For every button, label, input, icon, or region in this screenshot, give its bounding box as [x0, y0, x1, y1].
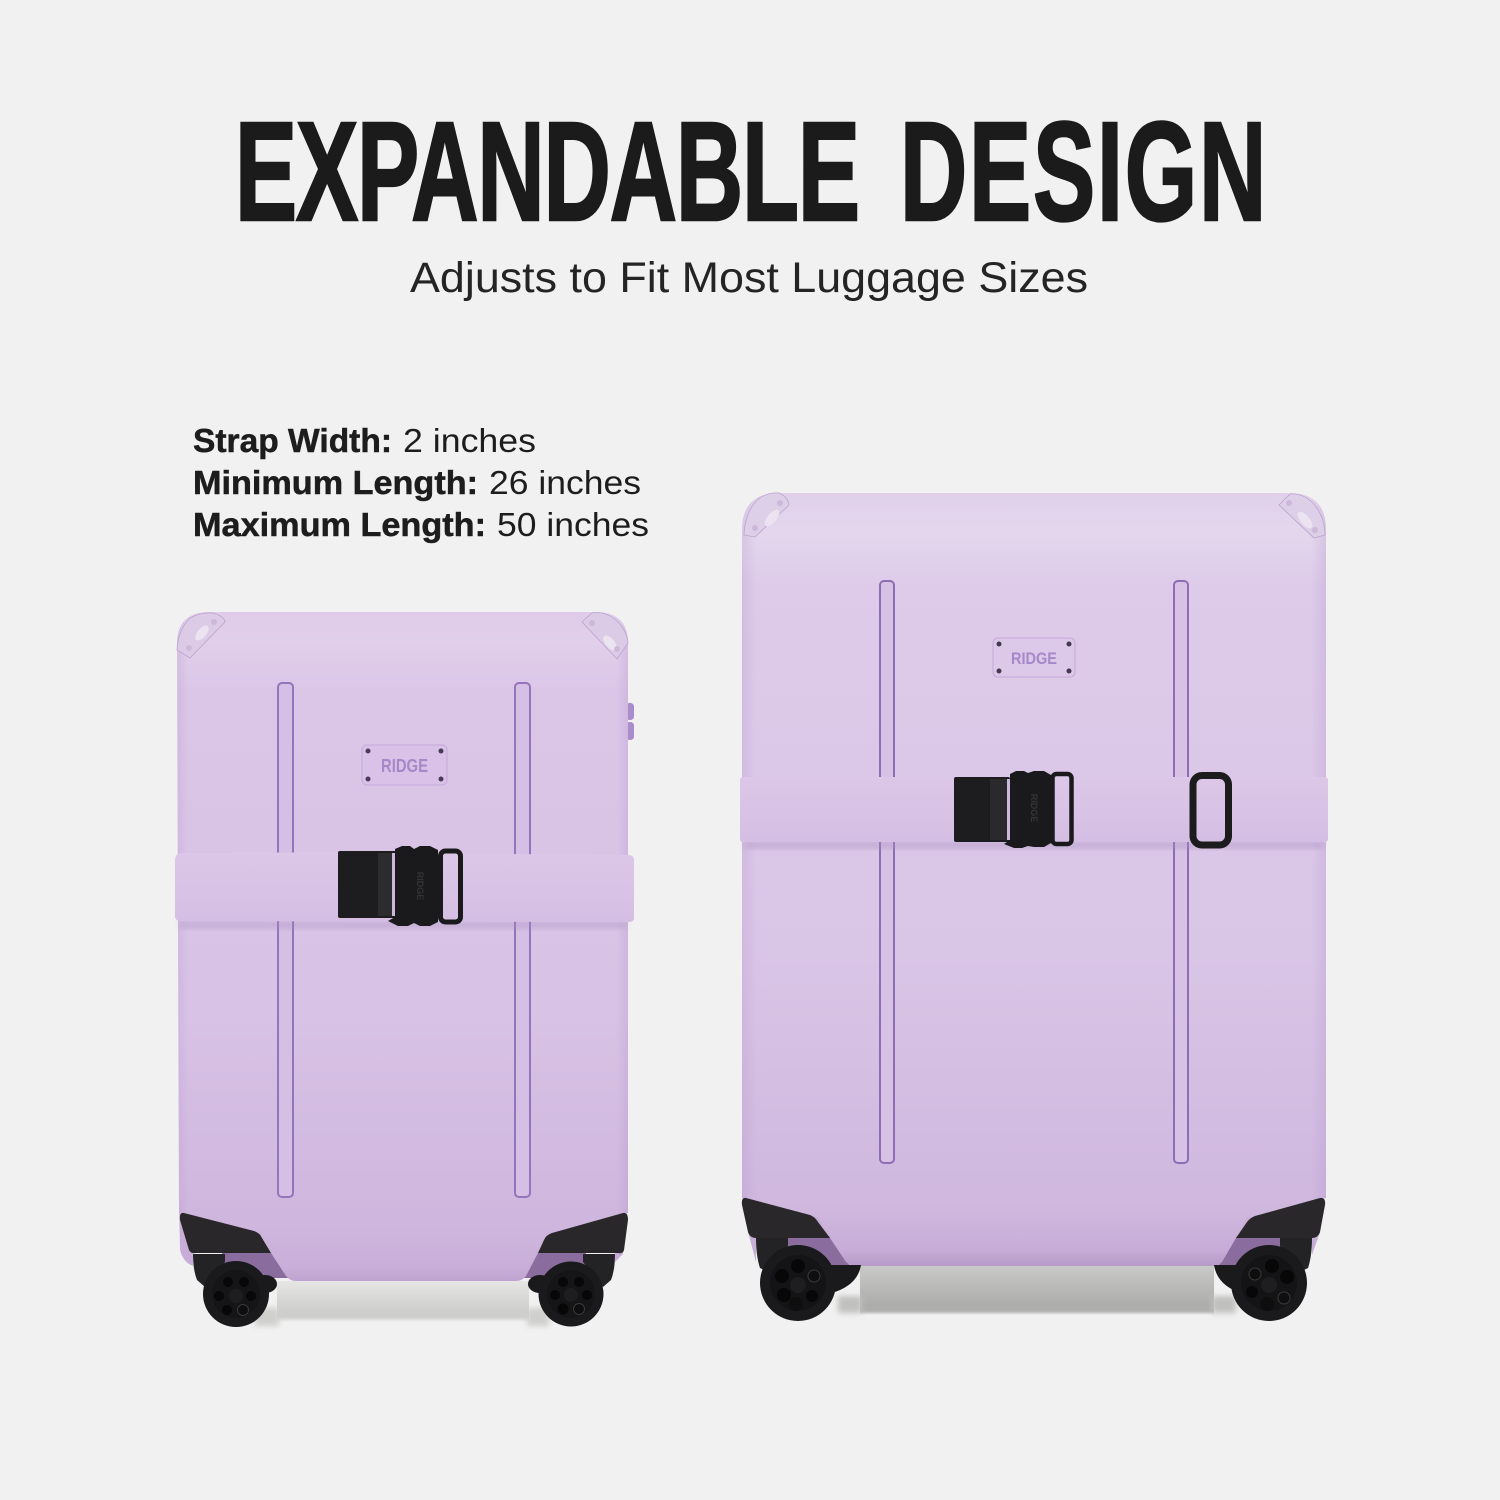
inner wheel right [528, 1275, 552, 1293]
case shell [742, 493, 1326, 1266]
black corner right [1236, 1198, 1325, 1238]
spec: strap width: 2 inches [403, 422, 536, 459]
buckle body [388, 846, 438, 926]
floor shadow: small suitcase [255, 1281, 549, 1326]
title [235, 94, 1266, 251]
wheel front left [203, 1261, 269, 1327]
title: DESIGN [900, 94, 1266, 251]
buckle [954, 771, 1072, 848]
rib left [880, 581, 894, 1163]
black corner left [180, 1213, 271, 1253]
wheel front right [538, 1262, 604, 1326]
brand plate [362, 745, 447, 785]
large suitcase [740, 493, 1328, 1321]
wheel notch right [521, 1252, 586, 1278]
spec: maximum length: 50 inches [497, 506, 649, 543]
rear base [179, 1200, 628, 1266]
buckle ring [440, 851, 460, 922]
buckle body [1004, 771, 1051, 848]
strap shadow [180, 922, 626, 928]
spec: minimum length [193, 464, 641, 501]
strap specifications [193, 422, 649, 543]
buckle embossed logo: RIDGE [415, 872, 425, 900]
case shell [177, 612, 628, 1281]
buckle [338, 846, 460, 926]
buckle ring [1052, 774, 1072, 844]
rear base [744, 1200, 1324, 1262]
buckle embossed logo: RIDGE [1029, 794, 1039, 822]
brand plate: RIDGE [381, 756, 428, 776]
wheel notch right [1218, 1236, 1282, 1266]
spec: minimum length: Minimum Length: [193, 464, 478, 501]
strap slider [1193, 776, 1228, 845]
title: EXPANDABLE [235, 94, 860, 251]
wheel front left [760, 1245, 836, 1321]
wheel support right [583, 1254, 615, 1287]
inner wheel left [253, 1275, 277, 1293]
buckle slit [1007, 779, 1010, 840]
rib left [278, 683, 293, 1197]
spec: strap width: Strap Width: [193, 422, 392, 459]
wheel notch left [222, 1252, 288, 1278]
buckle strap end [954, 777, 1010, 842]
inner wheel right [1214, 1265, 1244, 1292]
strap [175, 852, 634, 922]
brand plate [993, 638, 1075, 677]
strap shadow [745, 842, 1323, 848]
small suitcase [175, 612, 634, 1327]
wheel support left [756, 1238, 788, 1272]
corner guard top left [744, 493, 789, 537]
rib right [1174, 581, 1188, 1163]
spec: strap width [193, 422, 536, 459]
side handle bump [626, 703, 634, 740]
spec: maximum length [193, 506, 649, 543]
wheel support left [193, 1254, 225, 1287]
buckle slit [392, 853, 395, 916]
buckle strap end [338, 851, 397, 918]
black corner right [538, 1213, 628, 1253]
floor shadow: large suitcase [838, 1266, 1236, 1315]
subtitle: Adjusts to Fit Most Luggage Sizes [410, 254, 1088, 302]
brand plate: RIDGE [1011, 649, 1057, 668]
spec: minimum length: 26 inches [489, 464, 641, 501]
spec: maximum length: Maximum Length: [193, 506, 486, 543]
wheel front right [1231, 1245, 1307, 1321]
corner guard top left [177, 613, 225, 658]
wheel support right [1280, 1238, 1312, 1272]
wheel notch left [786, 1236, 850, 1266]
corner guard top right [1279, 494, 1325, 538]
strap [740, 777, 1328, 842]
inner wheel left [828, 1265, 861, 1292]
black corner left [742, 1198, 830, 1238]
rib right [515, 683, 530, 1197]
corner guard top right [582, 613, 628, 659]
